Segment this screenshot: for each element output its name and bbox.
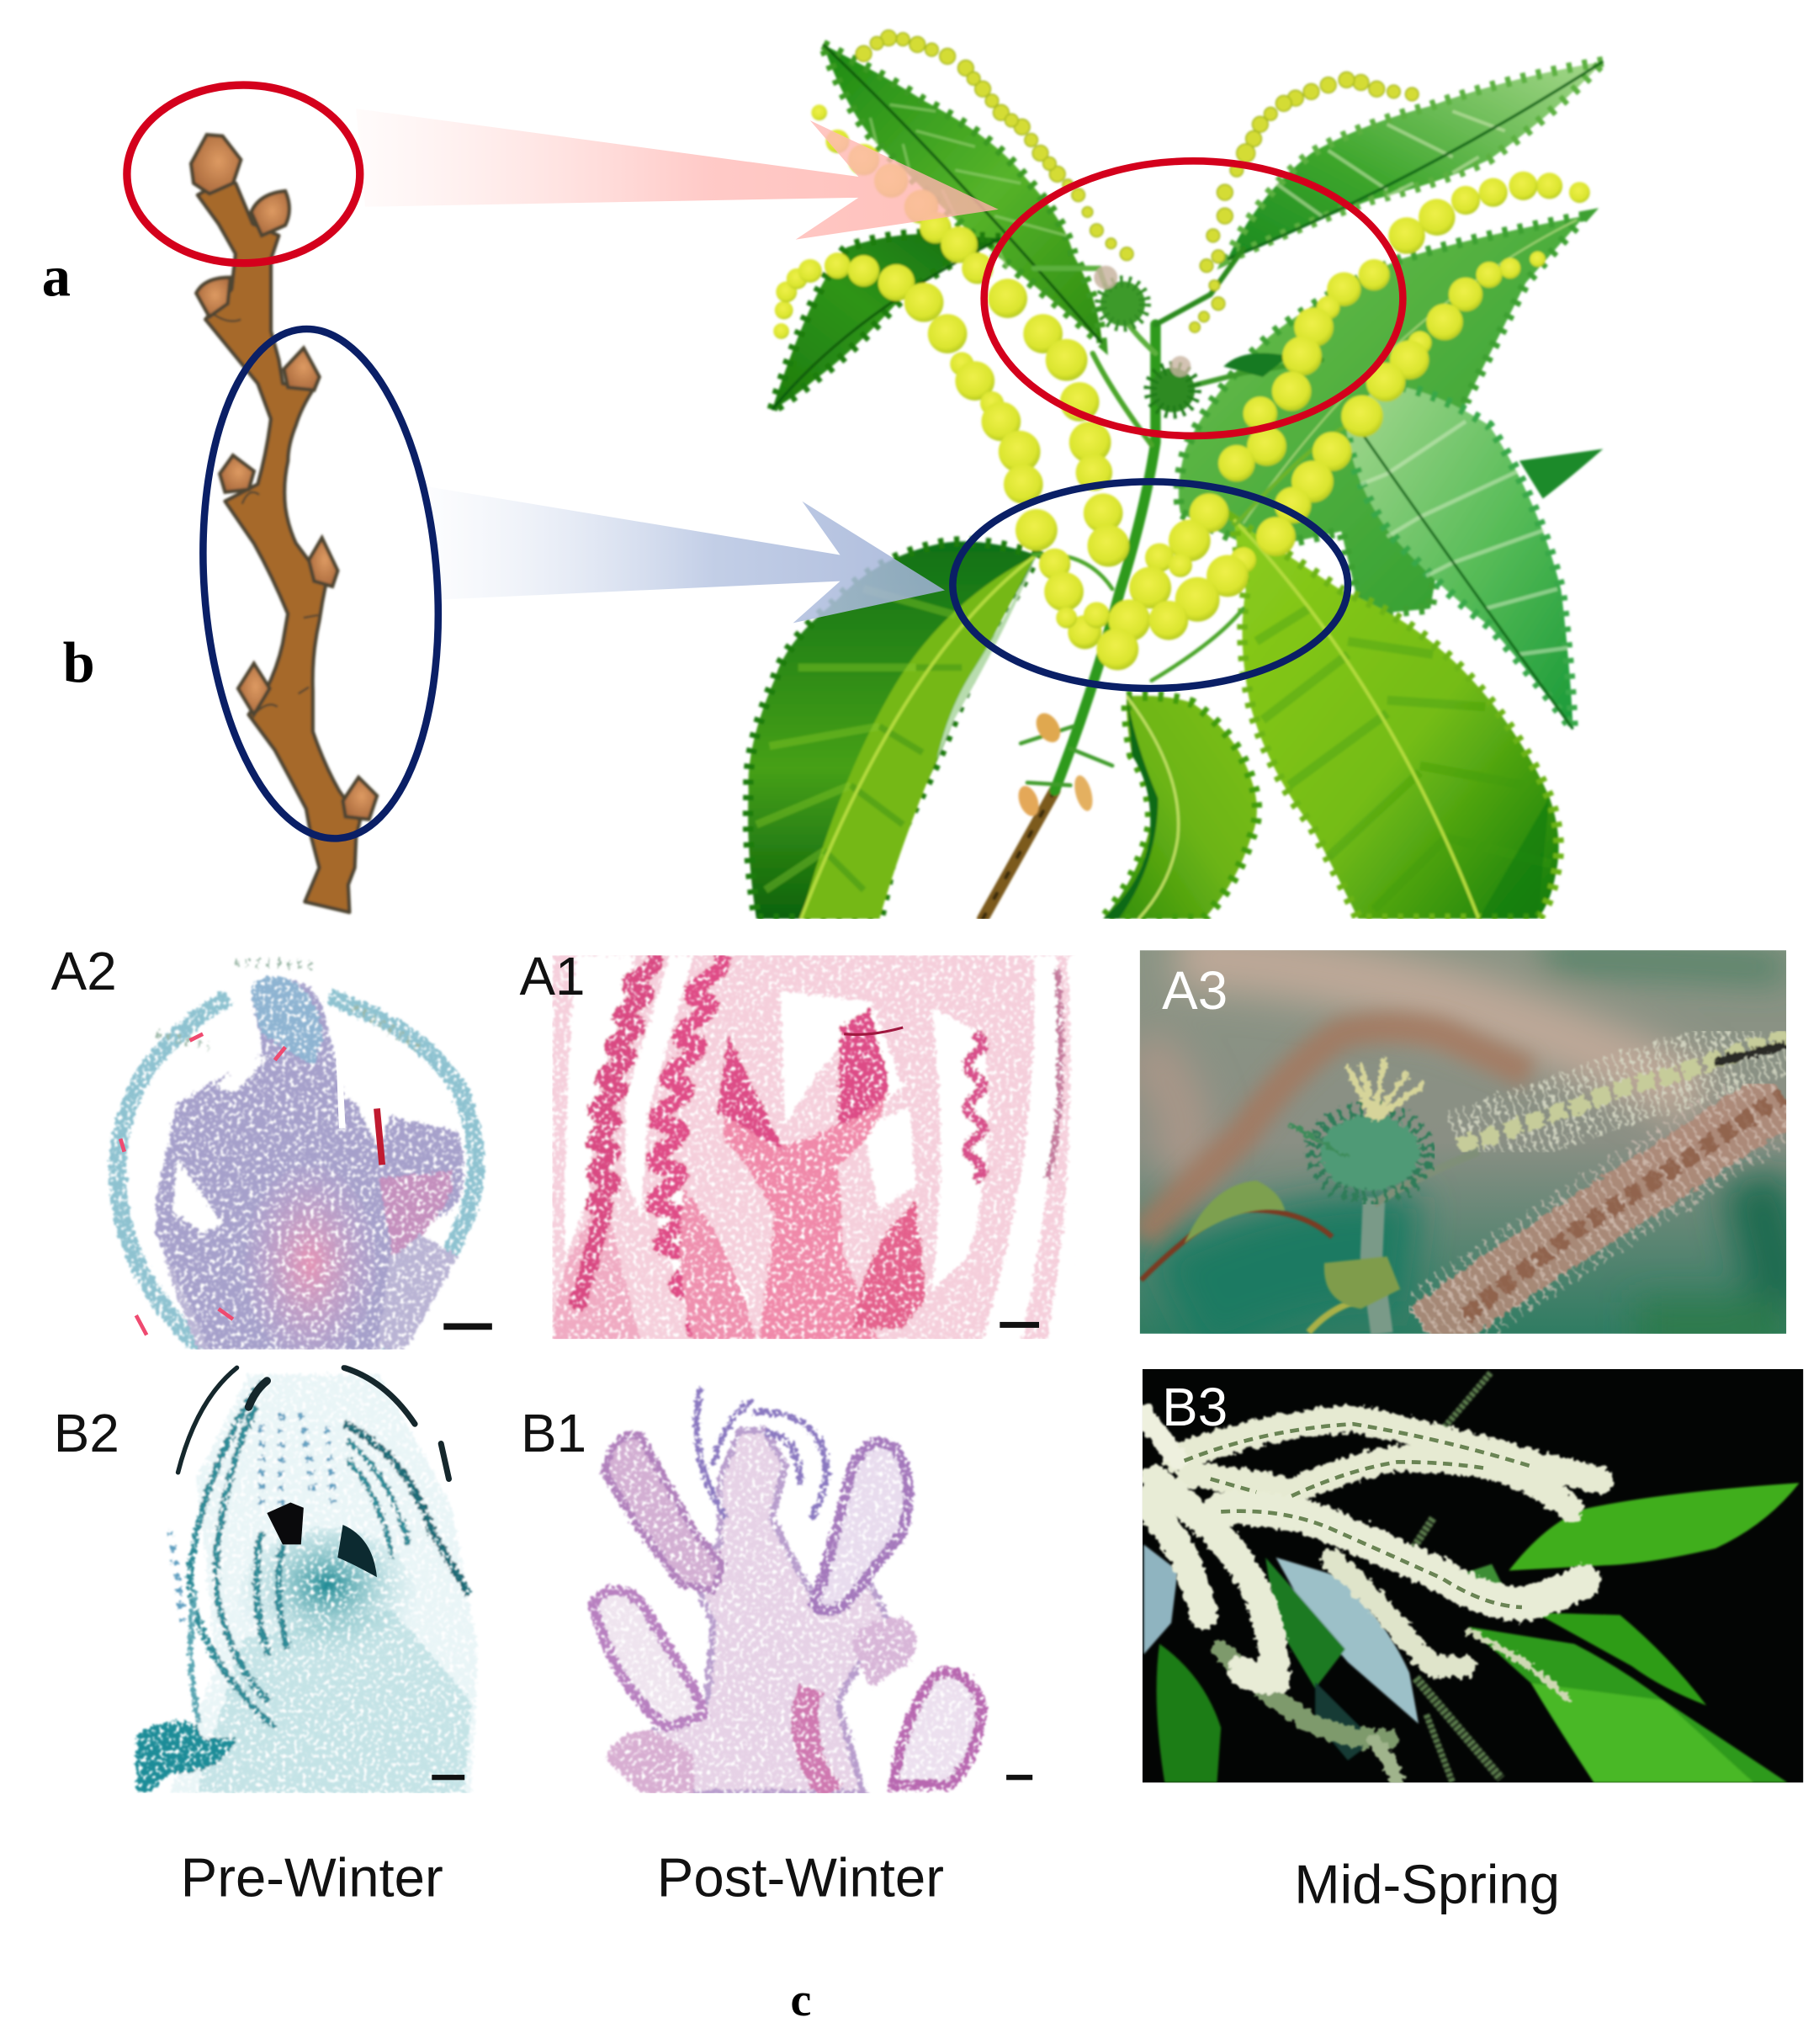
thin catkin: upper left bbox=[856, 30, 1133, 261]
B2 teal folds bbox=[190, 1381, 469, 1728]
B1 tissue bbox=[593, 1388, 982, 1793]
A3 upper flowering catkin bbox=[1459, 1037, 1786, 1146]
micrograph B2 bbox=[136, 1367, 478, 1793]
A3 background bbox=[1140, 950, 1786, 1334]
B3 leaves bbox=[1143, 1483, 1800, 1782]
B2 black arcs bbox=[178, 1367, 449, 1479]
callout: red ellipse on plant bbox=[984, 161, 1403, 436]
A1 central axis bbox=[723, 1008, 890, 1343]
twig bud: upper left bbox=[196, 278, 231, 316]
A2 outer scale ring bbox=[118, 997, 475, 1350]
leaf: small left bbox=[772, 234, 1001, 410]
B1 right lower finger bbox=[894, 1672, 982, 1786]
A1 white gaps bbox=[565, 955, 1076, 1343]
B2 lower tissue bbox=[196, 1610, 471, 1793]
label B2: B2 bbox=[54, 1403, 119, 1463]
B2 tissue bbox=[136, 1374, 478, 1793]
A1 lower finger bbox=[680, 1188, 756, 1343]
bur: lower bbox=[1150, 356, 1195, 412]
leaf: small right tip bbox=[1519, 449, 1603, 499]
leaf: upper left bbox=[823, 45, 1102, 343]
leaf: bottom middle bbox=[1103, 696, 1257, 919]
B3 stems bbox=[1403, 1373, 1501, 1782]
A1 deep-pink apex bbox=[717, 1008, 890, 1152]
bract leaf bbox=[1223, 353, 1289, 377]
caption: Pre-Winter: Pre-Winter bbox=[181, 1847, 443, 1909]
leaf: upper right bbox=[1228, 61, 1603, 259]
label A1: A1 bbox=[520, 946, 585, 1006]
micrograph A2 bbox=[118, 962, 475, 1362]
A1 right wave bbox=[967, 1034, 983, 1181]
B2 pale mass bbox=[170, 1374, 478, 1793]
callout: red ellipse on twig bbox=[127, 85, 360, 263]
A3 stem and branch bbox=[1141, 1152, 1479, 1334]
leaf: lower right big bbox=[1234, 519, 1559, 919]
A2 red streak bbox=[377, 1108, 382, 1165]
A3 female bur bbox=[1289, 1058, 1428, 1197]
B1 finger upper-right bbox=[814, 1442, 908, 1611]
A2 sliver bbox=[335, 1027, 346, 1128]
A1 wavy tissue second bbox=[655, 958, 723, 1335]
A3 blurred background streaks bbox=[1140, 955, 1786, 1329]
B2 scale bar bbox=[432, 1775, 464, 1780]
leaf: right mid behind bbox=[1179, 216, 1585, 615]
twig bud: mid left bbox=[220, 455, 254, 492]
A2 scattered specks bbox=[157, 962, 419, 1047]
A1 tissue bbox=[552, 953, 1076, 1343]
label B3: B3 bbox=[1162, 1377, 1228, 1437]
A2 pink right lobe bbox=[379, 1171, 452, 1256]
micrograph A1 bbox=[552, 953, 1076, 1343]
B1 finger upper-left bbox=[605, 1435, 723, 1590]
A2 tissue bbox=[118, 962, 475, 1362]
big catkin: centre descending bbox=[811, 104, 1129, 566]
thin catkin: upper right bbox=[1190, 72, 1419, 332]
twig bud: lower right bbox=[343, 778, 377, 820]
B1 bottom-left lobe bbox=[606, 1730, 693, 1793]
label A3: A3 bbox=[1162, 960, 1228, 1021]
B2 dark patches bbox=[267, 1503, 304, 1544]
caption: Post-Winter: Post-Winter bbox=[657, 1847, 944, 1909]
label B1: B1 bbox=[521, 1403, 586, 1463]
A2 red flecks bbox=[120, 1034, 285, 1335]
callout: blue ellipse on twig bbox=[187, 321, 454, 847]
small scales at stem base bbox=[1015, 709, 1096, 819]
B1 pink stripe bbox=[805, 1688, 831, 1793]
caption: Mid-Spring: Mid-Spring bbox=[1294, 1853, 1560, 1914]
big catkin: left arc bbox=[773, 252, 1102, 649]
twig bud: upper right bbox=[252, 191, 289, 236]
label c: c bbox=[790, 1974, 811, 2026]
label b: b bbox=[63, 630, 95, 694]
B2 central teal glow bbox=[238, 1527, 416, 1671]
B2 dots bbox=[170, 1414, 334, 1623]
big catkin: right arc bbox=[1108, 172, 1590, 641]
arrow: blue gradient pointing to plant bbox=[429, 487, 945, 623]
photo A3 bbox=[1140, 950, 1786, 1334]
A2 white gaps bbox=[172, 1047, 393, 1233]
B3 black background bbox=[1143, 1369, 1803, 1782]
twig bud: mid right bbox=[284, 348, 320, 390]
A1 right lobes bbox=[853, 1202, 926, 1329]
A1 lower-left pale mass bbox=[552, 1197, 641, 1343]
arrow: red gradient pointing to plant bbox=[356, 109, 999, 240]
A2 tip bbox=[250, 976, 323, 1067]
A1 scale bar bbox=[1000, 1322, 1039, 1328]
twig bud: lower left bbox=[238, 664, 269, 714]
twig bud: right bbox=[309, 538, 337, 587]
callout: blue ellipse on plant bbox=[952, 481, 1348, 688]
leaf: right pale bbox=[1346, 384, 1573, 729]
B1 body bbox=[615, 1431, 890, 1793]
twig creases bbox=[214, 314, 318, 714]
label a: a bbox=[42, 245, 71, 309]
A1 wavy tissue left bbox=[575, 958, 655, 1309]
B3 white catkins bbox=[1143, 1414, 1600, 1782]
A2 pink core bbox=[245, 1165, 375, 1362]
A3 rust catkin behind bbox=[1141, 1027, 1530, 1237]
twig branch bbox=[198, 181, 360, 912]
plant illustration bbox=[748, 30, 1603, 919]
B1 finger lower-left bbox=[593, 1590, 704, 1728]
micrograph B1 bbox=[593, 1388, 982, 1793]
photo B3 bbox=[1143, 1369, 1803, 1782]
stem and twigs bbox=[983, 249, 1348, 919]
A2 inner mass bbox=[156, 976, 464, 1350]
A3 small leaves bbox=[1185, 1181, 1400, 1309]
A3 lower right catkin bbox=[1426, 1096, 1782, 1332]
A1 dark streak bbox=[844, 1027, 903, 1034]
twig bud: terminal bbox=[191, 135, 241, 194]
B1 right stub bbox=[851, 1617, 916, 1688]
leaf: lower left big bbox=[748, 541, 1037, 919]
A2 basal tissue bbox=[163, 1217, 458, 1350]
big catkin: right lower arc bbox=[1056, 252, 1546, 670]
B3 catkin dark flecks bbox=[1185, 1424, 1530, 1607]
A2 scale bar bbox=[443, 1323, 492, 1330]
B2 teal blob bbox=[136, 1722, 236, 1793]
A1 pale base bbox=[552, 953, 1076, 1343]
panel a/b: twig with buds bbox=[191, 135, 377, 912]
A1 far-right edge bbox=[1047, 969, 1060, 1178]
label A2: A2 bbox=[51, 941, 117, 1001]
B1 apex folds bbox=[697, 1388, 826, 1518]
bur: upper bbox=[1094, 266, 1145, 326]
B1 scale bar bbox=[1006, 1775, 1032, 1780]
